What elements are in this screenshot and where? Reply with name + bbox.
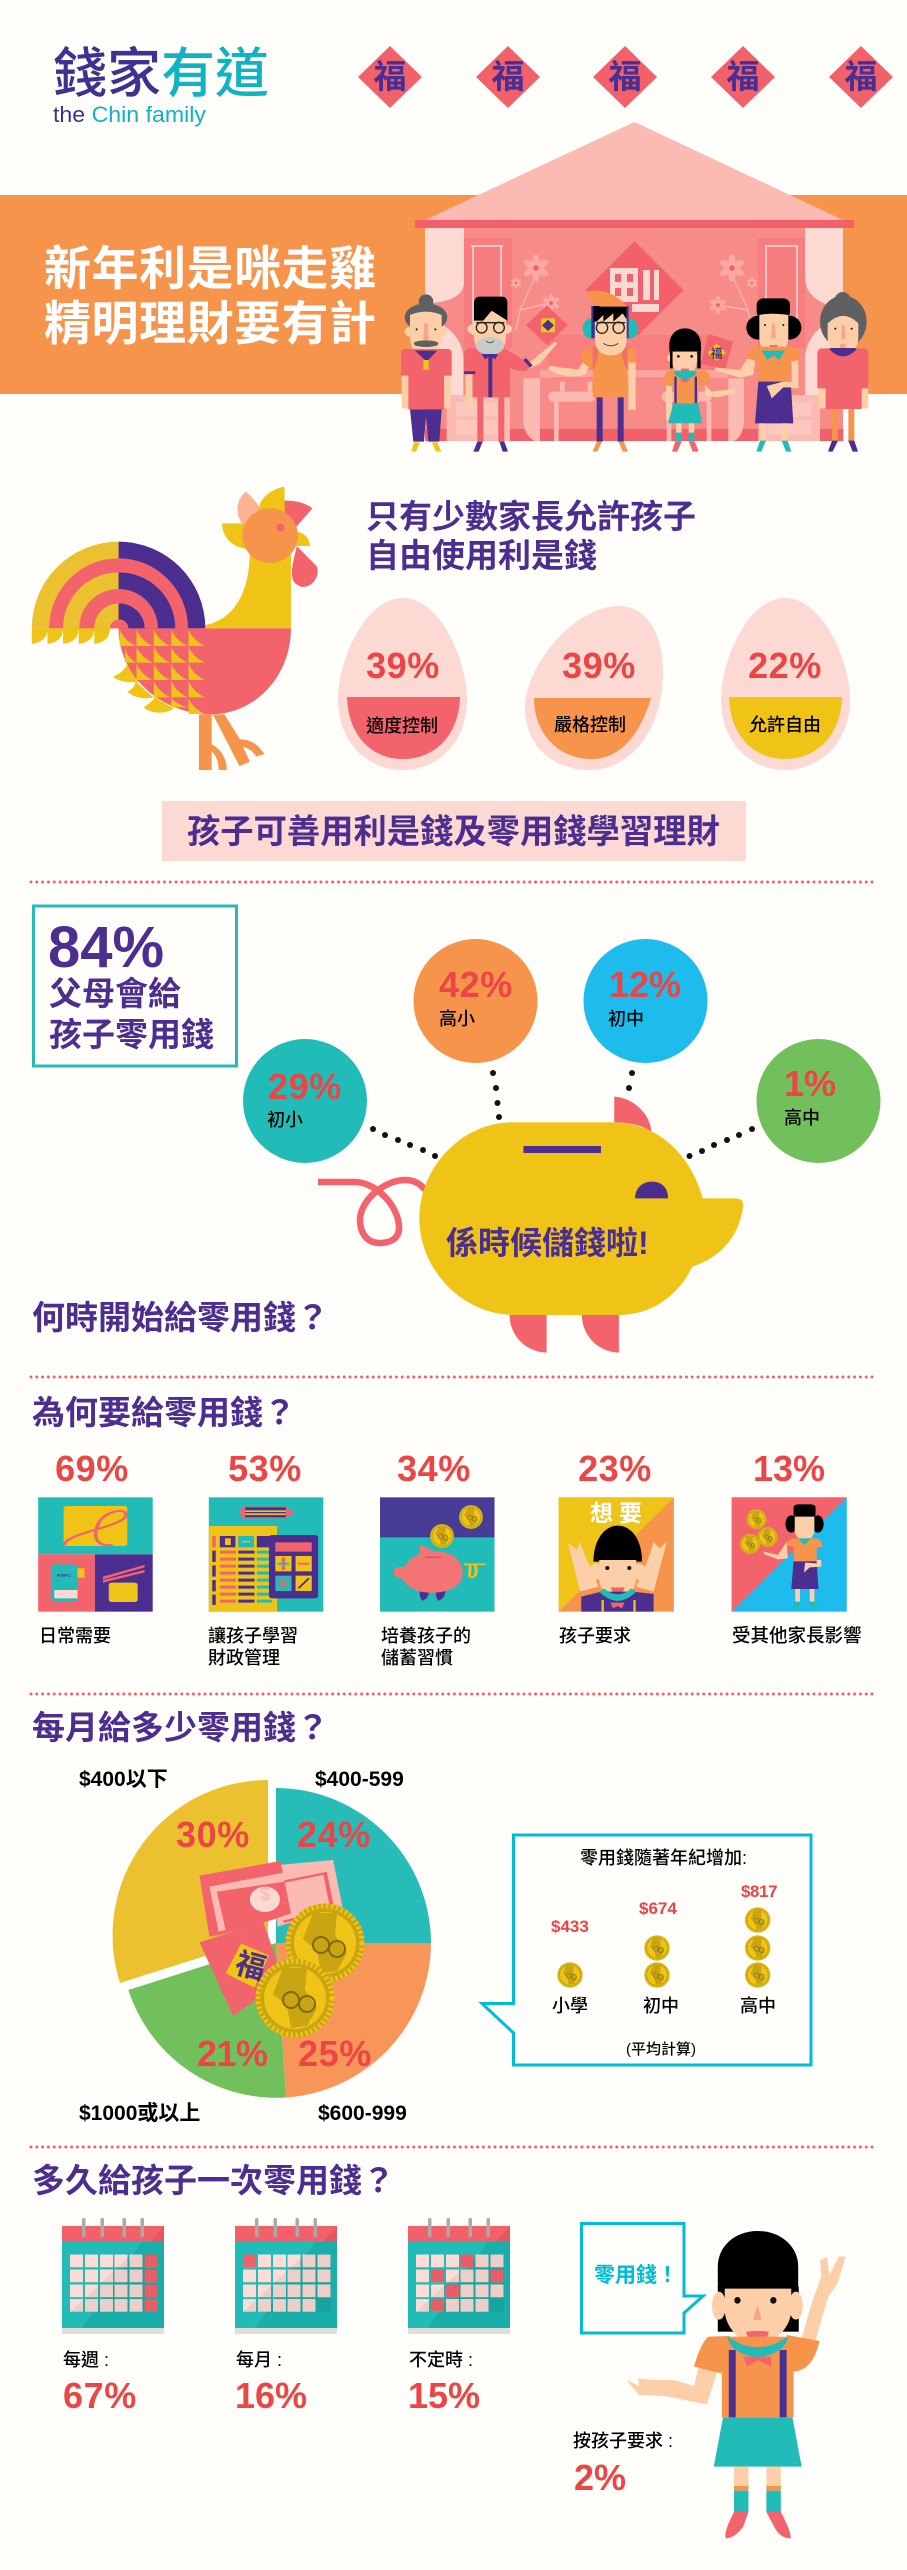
callout: allowance increases with age: 小學: [552, 1996, 588, 2016]
panel: 84% parents give pocket money: 父母會給: [49, 975, 181, 1012]
reason: 69% daily needs: [38, 1448, 153, 1646]
pie labels: [79, 1768, 407, 2125]
reason: 34% build saving habit: 34%: [397, 1448, 471, 1489]
reason: 34% build saving habit: 培養孩子的: [381, 1626, 471, 1646]
pie chart: 30%: [176, 1814, 250, 1855]
egg stat: 22% allow freedom: [721, 598, 850, 770]
panel: 84% parents give pocket money: 84%: [48, 915, 164, 980]
reason: 53% learn financial management: [208, 1448, 323, 1668]
speech bubble: pocket money: 零用錢！: [594, 2264, 678, 2287]
callout: allowance increases with age: $433: [551, 1917, 589, 1936]
logo: 錢家有道 the Chin family: 錢家有道: [53, 44, 269, 104]
speech bubble: pocket money: [582, 2224, 703, 2333]
bubble: 29% lower primary: [243, 1039, 367, 1163]
stat: on child's request 2%: 2%: [574, 2457, 626, 2498]
rooster illustration: [32, 487, 318, 770]
title: [44, 242, 376, 350]
person: grandmother: [817, 292, 868, 452]
egg stat: 39% moderate control: 39%: [366, 645, 440, 686]
reason: 23% children ask: [559, 1448, 674, 1646]
subtitle banner: 孩子可善用利是錢及零用錢學習理財: [187, 814, 720, 851]
egg stat: 39% strict control: 39%: [562, 645, 636, 686]
girl illustration: [626, 2231, 846, 2538]
logo: 錢家有道 the Chin family: the Chin family: [53, 102, 206, 127]
reason: 34% build saving habit: [380, 1448, 495, 1668]
money and red packet illustration: [200, 1860, 364, 2038]
reason: 23% children ask: 23%: [578, 1448, 652, 1489]
callout: allowance increases with age: (平均計算): [626, 2040, 696, 2058]
heading: few parents allow free use: 自由使用利是錢: [366, 537, 597, 574]
family illustration: [401, 291, 868, 452]
pie chart: [113, 1780, 431, 2098]
reason: 53% learn financial management: 讓孩子學習: [208, 1626, 298, 1646]
callout: allowance increases with age: [482, 1835, 811, 2065]
bubble: 12% junior secondary: [584, 939, 708, 1063]
pie chart: 21%: [197, 2033, 268, 2074]
dotted connectors: [370, 1070, 755, 1159]
piggy bank: 係時候儲錢啦!: [446, 1225, 649, 1261]
calendar: monthly 16%: 每月 :: [236, 2350, 282, 2370]
calendar: weekly 67%: 67%: [63, 2375, 137, 2416]
heading: how much pocket money: 每月給多少零用錢？: [32, 1709, 329, 1746]
callout: allowance increases with age: 初中: [643, 1996, 679, 2016]
calendar: weekly 67%: [62, 2218, 164, 2416]
bubble: 12% junior secondary: 初中: [608, 1009, 644, 1029]
red packet held by mother: 福: [711, 346, 723, 360]
person: father: [548, 291, 638, 452]
room furniture: [425, 320, 843, 441]
reason: 69% daily needs: 日常需要: [39, 1626, 111, 1646]
pie labels: $600-999: [318, 2102, 407, 2125]
stat: on child's request 2%: [573, 2431, 673, 2498]
money and red packet illustration: $: [260, 1884, 270, 1904]
pie labels: $1000或以上: [79, 2101, 200, 2125]
stat: on child's request 2%: 按孩子要求 :: [573, 2431, 673, 2451]
bubble: 29% lower primary: 初小: [267, 1110, 303, 1130]
fu diamonds: [358, 46, 893, 108]
callout: allowance increases with age: 高中: [740, 1996, 776, 2016]
reason: 34% build saving habit: 儲蓄習慣: [381, 1648, 453, 1668]
egg stat: 22% allow freedom: 允許自由: [749, 715, 821, 735]
bubble: 42% upper primary: [414, 939, 538, 1063]
bubble: 1% senior secondary: [756, 1039, 880, 1163]
egg stat: 39% strict control: 嚴格控制: [554, 715, 626, 735]
subtitle banner: [162, 801, 746, 861]
calendar: irregular 15%: 不定時 :: [409, 2350, 473, 2370]
person: mother: [715, 298, 801, 452]
reason: 13% influenced by other parents: [732, 1448, 862, 1646]
fu diamonds: 福: [374, 58, 406, 95]
fu diamonds: 福: [492, 58, 524, 95]
heading: how often: 多久給孩子一次零用錢？: [32, 2162, 395, 2199]
calendar: weekly 67%: 每週 :: [63, 2350, 109, 2370]
fu diamonds: 福: [844, 58, 878, 95]
panel: 84% parents give pocket money: [34, 906, 236, 1066]
pie chart: 25%: [298, 2033, 372, 2074]
calendar: monthly 16%: [235, 2218, 337, 2416]
reason: 13% influenced by other parents: 受其他家長影響: [732, 1625, 862, 1646]
bubble: 1% senior secondary: 1%: [784, 1063, 836, 1104]
panel: 84% parents give pocket money: 孩子零用錢: [49, 1016, 214, 1053]
bubble: 1% senior secondary: 高中: [784, 1108, 820, 1128]
reason: 23% children ask: 要: [619, 1500, 642, 1526]
callout: allowance increases with age: $817: [741, 1882, 777, 1901]
fu diamonds: 福: [726, 58, 760, 95]
bubble: 42% upper primary: 高小: [439, 1009, 475, 1029]
title: 精明理財要有計: [44, 297, 376, 350]
reason: 69% daily needs: 69%: [55, 1448, 129, 1489]
reason: 13% influenced by other parents: 13%: [753, 1448, 825, 1489]
egg stat: 39% moderate control: 適度控制: [366, 716, 438, 736]
reason: 53% learn financial management: 財政管理: [208, 1648, 280, 1668]
calendar: irregular 15%: 15%: [408, 2375, 480, 2416]
reason: 23% children ask: 想: [590, 1500, 613, 1526]
house: [415, 122, 854, 441]
money and red packet illustration: 福: [232, 1947, 269, 1987]
person: grandfather: [401, 294, 452, 452]
fu diamonds: 福: [608, 58, 642, 95]
reason: 53% learn financial management: 53%: [228, 1448, 302, 1489]
pie labels: $400以下: [79, 1768, 168, 1791]
egg stat: 39% strict control: [525, 606, 663, 770]
person: girl: [664, 328, 737, 452]
bubble: 12% junior secondary: 12%: [609, 964, 681, 1005]
red packet held by grandfather: [526, 305, 568, 345]
piggy bank: [318, 1097, 743, 1353]
callout: allowance increases with age: $674: [639, 1899, 677, 1918]
calendar: monthly 16%: 16%: [235, 2375, 307, 2416]
egg stat: 22% allow freedom: 22%: [748, 645, 822, 686]
person: grandfather with glasses: [464, 297, 557, 452]
pie labels: $400-599: [315, 1768, 404, 1791]
reason: 69% daily needs: ABC: [56, 1574, 71, 1578]
reason: 23% children ask: 孩子要求: [559, 1626, 631, 1646]
title: 新年利是咪走雞: [44, 242, 376, 295]
calendar: irregular 15%: [408, 2218, 510, 2416]
pie chart: 24%: [297, 1814, 371, 1855]
bubble: 29% lower primary: 29%: [268, 1066, 342, 1107]
orange title banner: [0, 195, 907, 394]
heading: why give pocket money: 為何要給零用錢？: [32, 1394, 296, 1431]
red packet held by mother: [701, 334, 733, 370]
heading: few parents allow free use: 只有少數家長允許孩子: [366, 498, 696, 535]
heading: when to start: 何時開始給零用錢？: [32, 1299, 329, 1336]
egg stat: 39% moderate control: [338, 598, 467, 770]
heading: few parents allow free use: [366, 498, 696, 574]
callout: allowance increases with age: 零用錢隨著年紀增加:: [580, 1848, 747, 1868]
bubble: 42% upper primary: 42%: [439, 964, 513, 1005]
